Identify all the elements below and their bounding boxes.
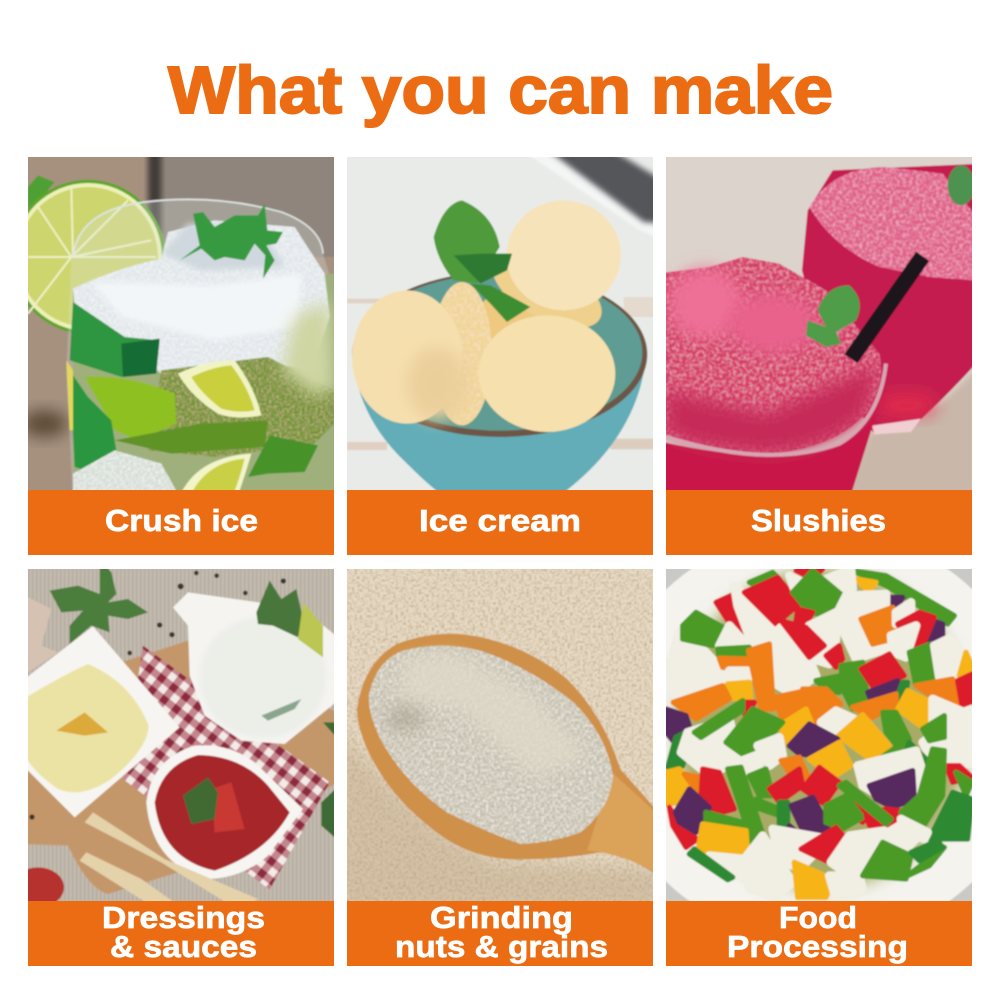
peppercorns	[29, 571, 286, 820]
red sauce in bowl	[146, 745, 303, 879]
straw	[851, 256, 923, 359]
front slushie	[656, 257, 886, 500]
yellow sauce in square dish	[18, 626, 180, 817]
panel: grinding nuts and grains	[337, 559, 663, 966]
label band: food processing	[666, 900, 972, 966]
wooden board	[18, 641, 344, 894]
tomato	[28, 866, 65, 901]
photo: three bowls of sauces on board	[28, 569, 334, 901]
crushed ice	[73, 220, 330, 374]
label band: slushies: Slushies	[751, 503, 886, 538]
label band: grinding nuts and grains	[347, 900, 653, 966]
ground grain	[369, 646, 613, 844]
label band: grinding nuts and grains: Grinding	[430, 900, 573, 935]
vegetable pieces	[666, 569, 972, 899]
panel: slushies	[656, 147, 986, 555]
checked cloth	[123, 646, 330, 890]
label band: dressings and sauces	[28, 900, 334, 966]
wooden spoon	[357, 634, 663, 879]
panel: food processing	[666, 569, 972, 966]
panel: crush ice	[28, 157, 334, 555]
glass body	[66, 199, 334, 500]
panel: dressings and sauces	[28, 569, 334, 966]
knife in background	[534, 157, 653, 235]
label band: dressings and sauces: & sauces	[110, 929, 257, 964]
label band: slushies	[666, 490, 972, 555]
label band: food processing: Processing	[727, 929, 908, 964]
white dip in bowl	[173, 581, 344, 744]
basil leaves	[49, 569, 148, 644]
title: What you can make	[168, 53, 833, 128]
photo: pink slushies with black straw	[666, 157, 972, 490]
mint sprig	[180, 204, 283, 279]
photo: ice cream scoops in teal bowl	[347, 157, 653, 490]
right leaves	[320, 722, 334, 838]
label band: grinding nuts and grains: nuts & grains	[395, 929, 608, 964]
muddled lime and mint	[66, 300, 334, 500]
label band: food processing: Food	[779, 900, 857, 935]
photo: wooden spoon of ground grain	[347, 569, 653, 901]
mint leaf	[806, 285, 860, 347]
teal bowl	[352, 272, 647, 500]
photo: mojito glass with crushed ice and lime	[28, 157, 334, 490]
photo: bowl of chopped vegetables	[666, 569, 972, 901]
label band: crush ice: Crush ice	[105, 503, 258, 538]
ice cream scoops	[352, 200, 621, 432]
back slushie glass	[802, 164, 982, 434]
label band: ice cream: Ice cream	[419, 503, 581, 538]
lime slice on rim	[28, 179, 165, 333]
label band: ice cream	[347, 490, 653, 555]
wooden picks	[79, 812, 258, 901]
mint sprig	[434, 200, 530, 322]
fork	[28, 597, 58, 672]
label band: dressings and sauces: Dressings	[102, 900, 265, 935]
label band: crush ice	[28, 490, 334, 555]
panel: ice cream	[337, 147, 663, 555]
